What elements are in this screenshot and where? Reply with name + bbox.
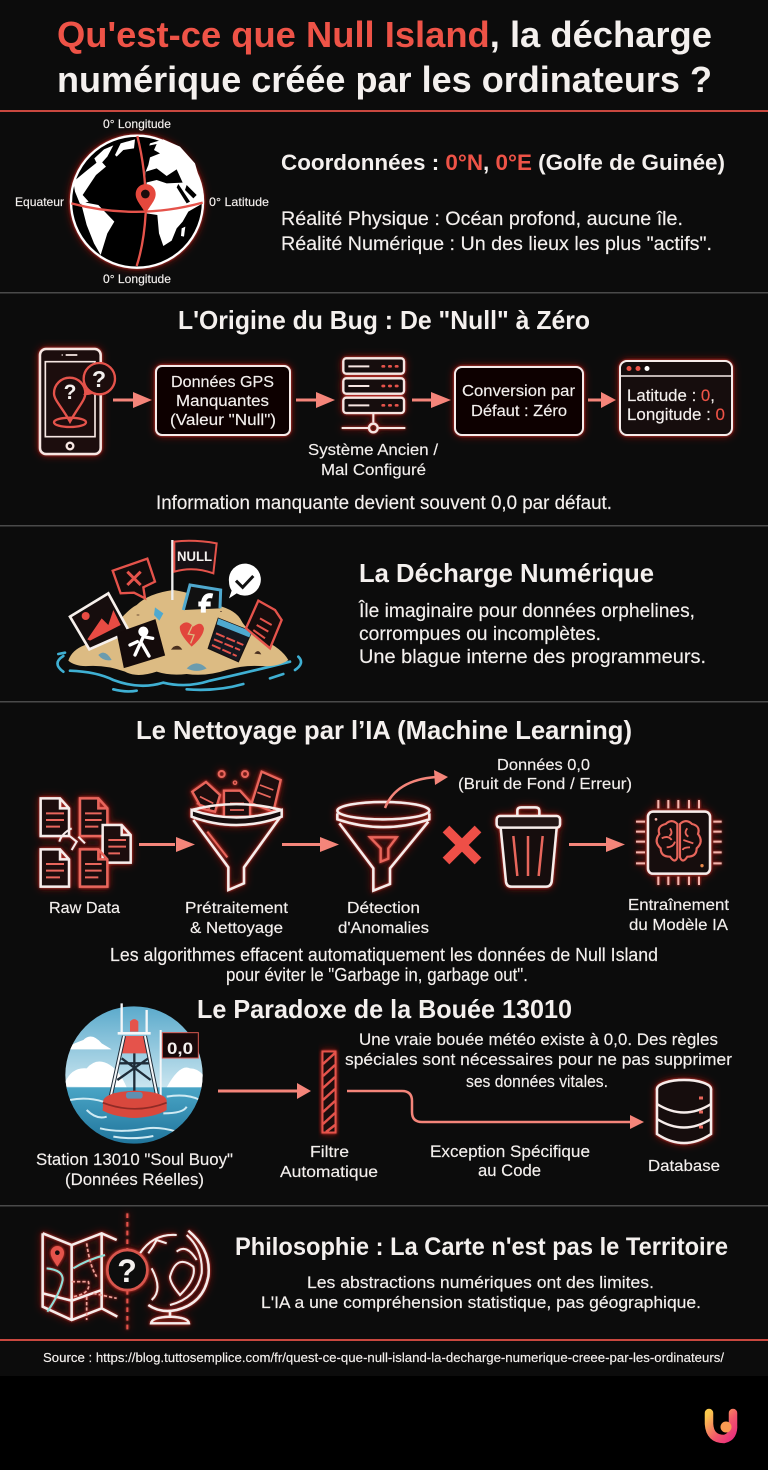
heading: buoy: Le Paradoxe de la Bouée 13010 (197, 994, 572, 1024)
heading: philosophy: Philosophie : La Carte n'est pas le Territoire (235, 1233, 728, 1261)
arrow (113, 392, 152, 408)
icon glyphs: question marks: ? (64, 381, 76, 404)
text: dump description: Une blague interne des programmeurs. (359, 647, 706, 668)
label: anomaly detection: Détection (347, 900, 420, 917)
text: realities (281, 209, 712, 255)
label: model training: Entraînement (628, 897, 730, 914)
label: preprocessing: Prétraitement (185, 900, 289, 917)
heading: coordinates: Coordonnées : 0°N, 0°E (Golfe de Guinée) (281, 150, 725, 175)
label: latitude: 0° Latitude (209, 195, 269, 209)
title: Qu'est-ce que Null Island, la décharge (57, 14, 712, 55)
label: noise (458, 757, 632, 793)
icon glyphs: question marks: ? (92, 366, 106, 392)
heading: origin: L'Origine du Bug : De "Null" à Zéro (178, 305, 590, 335)
window: latitude longitude (620, 361, 732, 435)
flag label: 0,0: 0,0 (167, 1039, 193, 1058)
label: station (36, 1150, 233, 1189)
box: missing GPS data: (Valeur "Null") (170, 412, 276, 429)
text: algorithm note: Les algorithmes effacent automatiquement les données de Null Island (110, 945, 658, 965)
text: buoy description: spéciales sont nécessaires pour ne pas supprimer (345, 1050, 732, 1069)
text: buoy description: Une vraie bouée météo existe à 0,0. Des règles (359, 1030, 718, 1049)
text: philosophy description (261, 1273, 701, 1312)
icon label: null flag: NULL (177, 548, 212, 564)
label: exception (430, 1142, 590, 1180)
arrow: curved to noise (385, 770, 448, 808)
heading: dump: La Décharge Numérique (359, 558, 654, 588)
source line: Source : https://blog.tuttosemplice.com/fr/quest-ce-que-null-island-la-decharge-numerique-creee-par-les-ordinateurs/ (43, 1350, 724, 1365)
heading: cleaning: Le Nettoyage par l’IA (Machine Learning) (136, 715, 632, 745)
label: noise: Données 0,0 (497, 757, 590, 774)
icon: red cross (446, 829, 478, 861)
label: legacy system: Mal Configuré (321, 462, 426, 479)
text: realities: Réalité Numérique : Un des lieux les plus "actifs". (281, 234, 712, 255)
panel: coordinates (15, 117, 725, 286)
label: model training (628, 897, 730, 934)
label: preprocessing (185, 900, 289, 937)
text: dump description: Île imaginaire pour données orphelines, (358, 600, 695, 622)
text: buoy description (345, 1030, 732, 1091)
label: anomaly detection: d'Anomalies (338, 920, 429, 937)
box: missing GPS data (156, 366, 290, 435)
box: default conversion: Défaut : Zéro (471, 403, 567, 420)
label: database: Database (648, 1158, 720, 1175)
title: numérique créée par les ordinateurs ? (57, 59, 712, 100)
label: filter: Filtre (310, 1144, 349, 1161)
text: realities: Réalité Physique : Océan profond, aucune île. (281, 209, 683, 230)
box: default conversion (455, 367, 583, 435)
arrow: exception bypass (347, 1091, 644, 1129)
label: longitude bottom: 0° Longitude (103, 272, 171, 286)
icon: preprocessing funnel (192, 771, 282, 890)
icon: trash (497, 807, 560, 887)
glyph: question mark: ? (117, 1253, 137, 1289)
arrow (588, 392, 616, 408)
text: algorithm note: pour éviter le "Garbage in, garbage out". (226, 965, 528, 985)
icon: database (657, 1080, 711, 1143)
logo (709, 1413, 733, 1439)
panel: philosophy (43, 1213, 728, 1333)
box: default conversion: Conversion par (462, 383, 576, 400)
arrow (296, 392, 335, 408)
text: algorithm note (110, 945, 658, 985)
label: legacy system: Système Ancien / (308, 442, 439, 459)
label: exception: Exception Spécifique (430, 1142, 590, 1161)
label: legacy system (308, 442, 439, 479)
label: station: Station 13010 "Soul Buoy" (36, 1150, 233, 1169)
arrow (282, 837, 339, 852)
text: dump description: corrompues ou incomplètes. (359, 624, 601, 645)
arrow (139, 837, 195, 852)
box: missing GPS data: Données GPS (171, 374, 274, 391)
window: latitude longitude: Longitude : 0 (627, 406, 725, 424)
label: station: (Données Réelles) (65, 1170, 204, 1189)
text: philosophy description: L'IA a une compréhension statistique, pas géographique. (261, 1293, 701, 1312)
label: longitude top: 0° Longitude (103, 117, 171, 131)
label: noise: (Bruit de Fond / Erreur) (458, 776, 632, 793)
icon: map and globe (43, 1213, 209, 1333)
panel: digital dump (57, 540, 706, 691)
label: filter (280, 1144, 378, 1181)
text: buoy description: ses données vitales. (466, 1072, 608, 1091)
title (57, 14, 712, 100)
text: dump description (358, 600, 706, 668)
icon: island of orphan data (57, 540, 301, 691)
text: philosophy description: Les abstractions numériques ont des limites. (307, 1273, 654, 1292)
arrow (569, 837, 625, 852)
window: latitude longitude: Latitude : 0, (627, 387, 715, 405)
icon: globe with pin at 0,0 (71, 136, 203, 268)
label: preprocessing: & Nettoyage (190, 920, 283, 937)
text: note: Information manquante devient souvent 0,0 par défaut. (156, 493, 612, 514)
icon: raw documents (41, 798, 131, 887)
box: missing GPS data: Manquantes (176, 393, 269, 410)
label: model training: du Modèle IA (629, 917, 728, 934)
icon glyphs: question marks (64, 366, 106, 404)
label: filter: Automatique (280, 1164, 378, 1181)
icon: anomaly funnel (337, 802, 429, 891)
arrow (412, 392, 451, 408)
icon: phone with question marks (40, 349, 115, 454)
label: exception: au Code (478, 1161, 541, 1180)
icon: AI chip with brain (636, 800, 722, 885)
panel: AI cleaning (41, 715, 730, 985)
icon: weather buoy (63, 1003, 207, 1147)
label: equator: Equateur (15, 195, 64, 209)
icon: server (342, 358, 405, 432)
panel: buoy paradox (36, 994, 732, 1189)
label: anomaly detection (338, 900, 429, 937)
arrow (218, 1083, 311, 1099)
icon: automatic filter (322, 1052, 336, 1132)
panel: origin of the bug (40, 305, 732, 514)
label: raw data: Raw Data (49, 900, 120, 917)
